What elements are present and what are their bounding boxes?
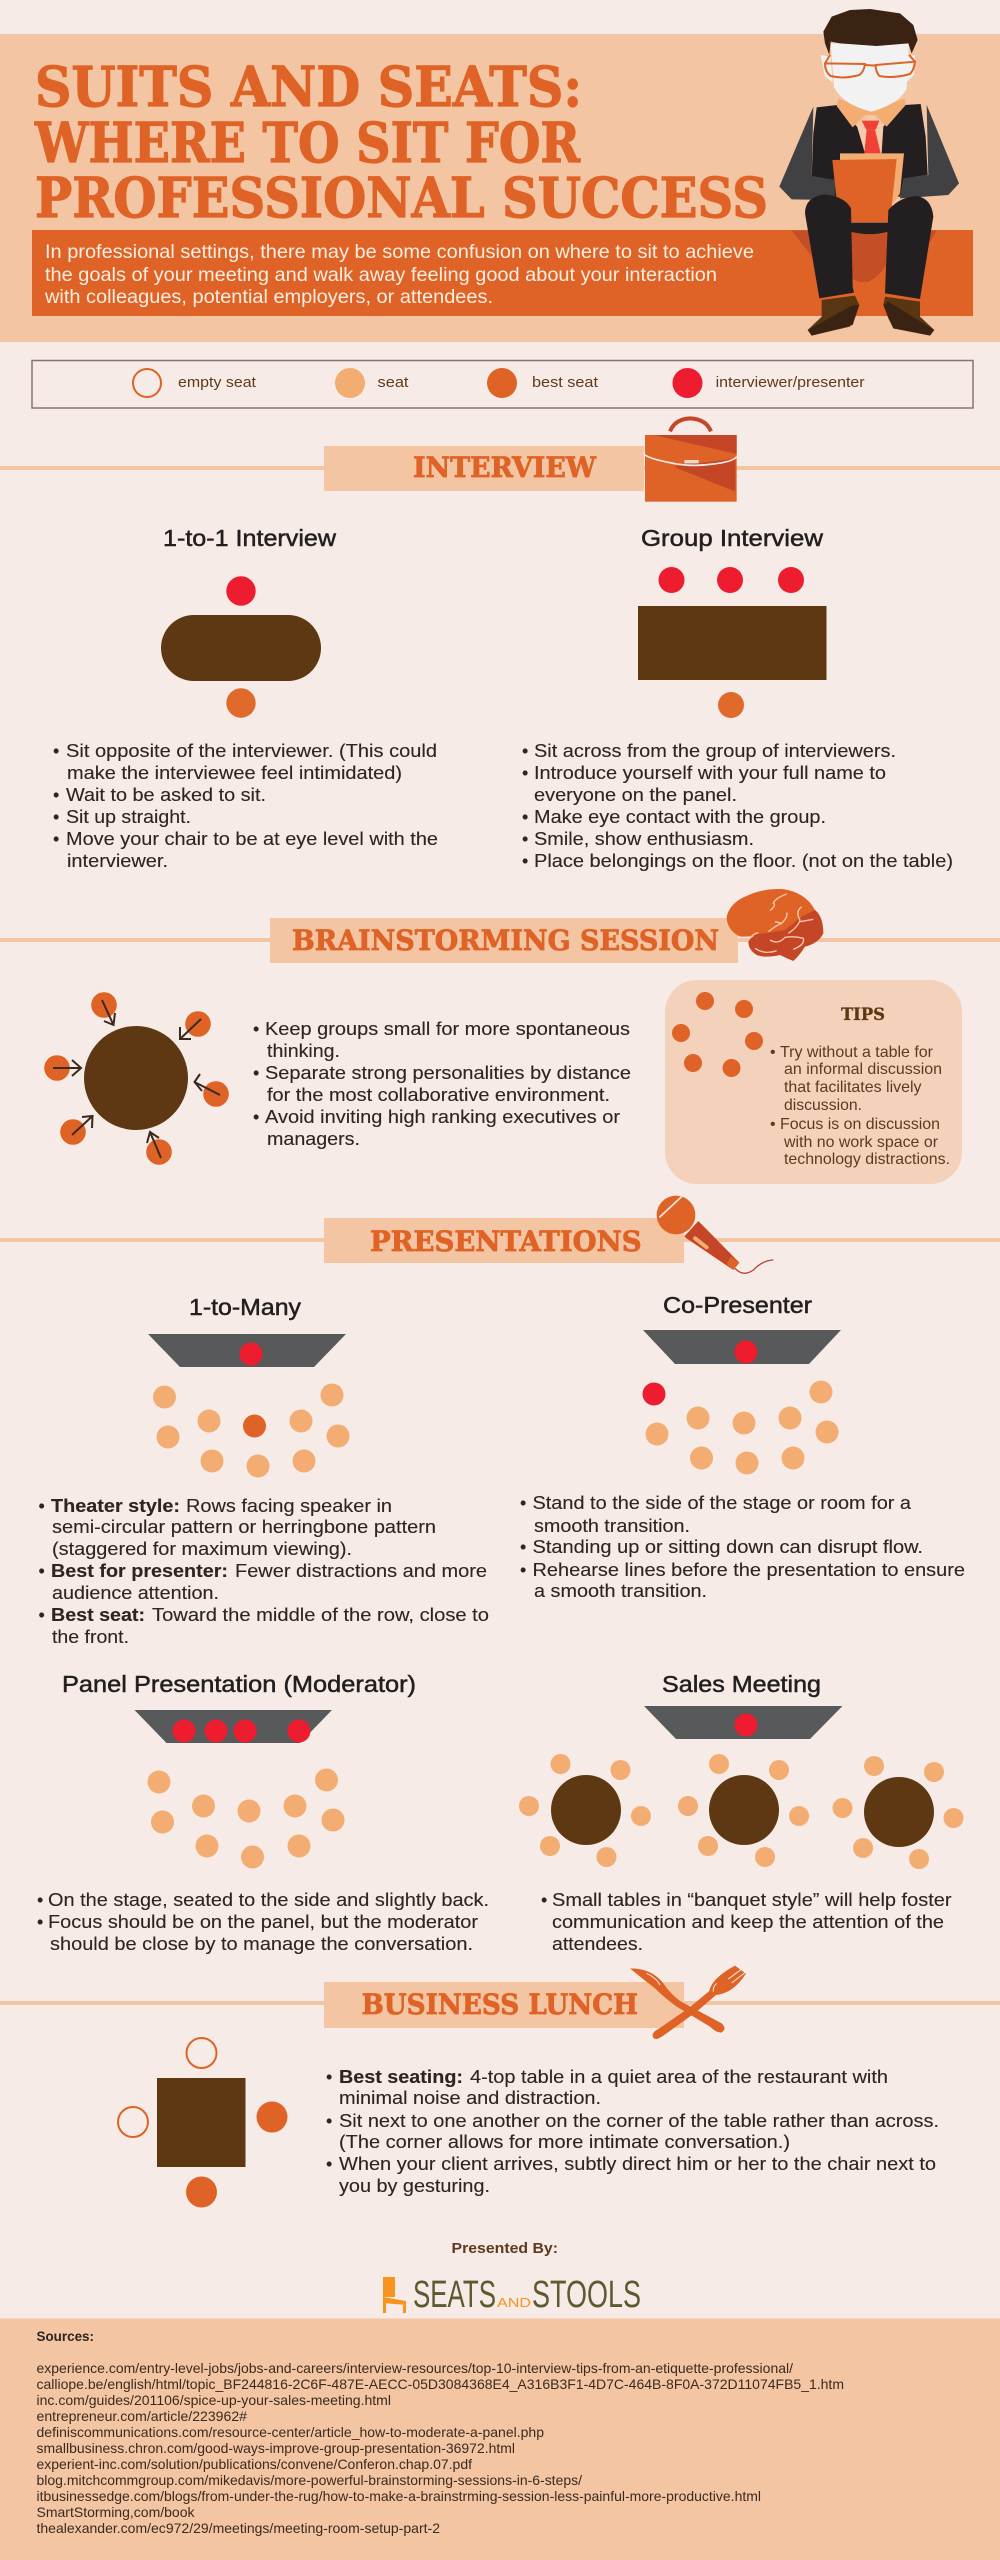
sources list: experient-inc.com/solution/publications/convene/Conferon.chap.07.pdf	[36, 2456, 472, 2472]
text: group tips: •	[522, 741, 528, 761]
text: business lunch tips: •	[326, 2067, 332, 2087]
panel: 1-to-1 interview: 1-to-1 Interview	[163, 525, 336, 551]
panel: co-presenter: Co-Presenter	[663, 1292, 812, 1318]
text: business lunch tips	[326, 2067, 939, 2196]
text: brainstorming points: Avoid inviting high ranking executives or	[265, 1107, 620, 1127]
sources list: experience.com/entry-level-jobs/jobs-and-careers/interview-resources/top-10-interview-tips-from-an-etiquette-professional/	[36, 2360, 793, 2376]
text: 1-to-1 tips: Wait to be asked to sit.	[66, 785, 266, 805]
text: 1-to-1 tips: make the interviewee feel intimidated)	[67, 763, 402, 783]
text: 1-to-many tips: •	[38, 1605, 45, 1625]
text: panel tips: should be close by to manage the conversation.	[50, 1934, 473, 1954]
diagram: 1-to-1 table	[161, 576, 321, 718]
panel: header	[0, 9, 1000, 342]
sources list: itbusinessedge.com/blogs/from-under-the-rug/how-to-make-a-brainstrming-session-less-painful-more-productive.html	[36, 2488, 761, 2504]
text: business lunch tips: Sit next to one another on the corner of the table rather than across.	[339, 2111, 939, 2131]
intro text bar: the goals of your meeting and walk away feeling good about your interaction	[45, 264, 717, 286]
text: brainstorming points: Keep groups small for more spontaneous	[265, 1019, 630, 1039]
legend: seat: seat	[378, 374, 409, 391]
text: group tips: •	[522, 763, 528, 783]
icon: chair	[383, 2277, 406, 2313]
logo: seats and stools: STOOLS	[532, 2274, 641, 2316]
legend: interviewer/presenter: interviewer/presenter	[716, 374, 865, 391]
text: brainstorming points: Separate strong personalities by distance	[265, 1063, 631, 1083]
text: business lunch tips: •	[326, 2111, 332, 2131]
text: co-presenter tips: •	[520, 1493, 526, 1513]
panel: co-presenter	[520, 1292, 965, 1601]
panel: panel presentation	[37, 1671, 489, 1954]
text: brainstorming points: thinking.	[267, 1041, 340, 1061]
diagram: group table	[638, 567, 826, 718]
sources list: calliope.be/english/html/topic_BF244816-2C6F-487E-AECC-05D3084368E4_A316B3F1-4D7C-464B-8F0A-372D11074FB5_1.htm	[36, 2376, 844, 2392]
text: co-presenter tips	[520, 1493, 965, 1601]
sources list: inc.com/guides/201106/spice-up-your-sales-meeting.html	[36, 2392, 391, 2408]
intro text bar	[32, 230, 973, 316]
text: group tips: Make eye contact with the group.	[534, 807, 826, 827]
panel: tips	[665, 980, 962, 1184]
diagram: stage and theater seating	[148, 1334, 350, 1478]
icon: brain	[727, 889, 823, 961]
text: 1-to-many tips: Rows facing speaker in	[186, 1496, 392, 1516]
tips text	[770, 1044, 950, 1168]
section heading: presentations: PRESENTATIONS	[370, 1225, 642, 1258]
title: SUITS AND SEATS:	[35, 54, 582, 119]
text: sales tips: communication and keep the attention of the	[552, 1912, 944, 1932]
tips text: Try without a table for	[780, 1044, 934, 1061]
diagram: banquet tables	[519, 1706, 964, 1869]
title: PROFESSIONAL SUCCESS	[35, 165, 768, 230]
text: sales tips	[541, 1890, 952, 1954]
text: group tips: •	[522, 807, 528, 827]
text: 1-to-1 tips: •	[53, 785, 59, 805]
text: sales tips: •	[541, 1890, 547, 1910]
text: 1-to-many tips: (staggered for maximum viewing).	[52, 1539, 352, 1559]
text: business lunch tips: 4-top table in a quiet area of the restaurant with	[470, 2067, 888, 2087]
panel: sales meeting	[519, 1671, 964, 1954]
section heading: brainstorming session: BRAINSTORMING SESSION	[292, 924, 719, 957]
panel: sales meeting: Sales Meeting	[662, 1671, 821, 1697]
text: brainstorming points: •	[253, 1107, 259, 1127]
logo: seats and stools	[383, 2274, 641, 2316]
text: 1-to-many tips	[38, 1496, 489, 1647]
sources list: smallbusiness.chron.com/good-ways-improve-group-presentation-36972.html	[36, 2440, 515, 2456]
text: group tips	[522, 741, 953, 871]
text: 1-to-many tips: Fewer distractions and more	[235, 1561, 487, 1581]
tips text: •	[770, 1116, 776, 1133]
section heading: business lunch: BUSINESS LUNCH	[362, 1988, 638, 2021]
legend	[32, 360, 973, 408]
text: business lunch tips: •	[326, 2154, 332, 2174]
icon: knife and fork	[630, 1966, 746, 2039]
sources list: entrepreneur.com/article/223962#	[36, 2408, 247, 2424]
text: 1-to-many tips: Theater style:	[51, 1496, 180, 1516]
logo: seats and stools: SEATS	[413, 2274, 496, 2316]
section heading: interview	[0, 446, 1000, 491]
legend: seat	[335, 368, 409, 398]
text: 1-to-1 tips: •	[53, 807, 59, 827]
text: co-presenter tips: Rehearse lines before the presentation to ensure	[532, 1560, 965, 1580]
text: brainstorming points: •	[253, 1019, 259, 1039]
sources list: definiscommunications.com/resource-center/article_how-to-moderate-a-panel.php	[36, 2424, 544, 2440]
text: 1-to-many tips: the front.	[52, 1627, 129, 1647]
text: 1-to-many tips: •	[38, 1496, 45, 1516]
text: group tips: Introduce yourself with your full name to	[534, 763, 886, 783]
section heading: interview: INTERVIEW	[413, 451, 597, 484]
text: business lunch tips: minimal noise and distraction.	[339, 2088, 601, 2108]
title: WHERE TO SIT FOR	[34, 110, 581, 175]
text: co-presenter tips: •	[520, 1537, 526, 1557]
legend: best seat: best seat	[532, 374, 599, 391]
icon: briefcase	[643, 418, 737, 502]
text: group tips: •	[522, 829, 528, 849]
text: 1-to-many tips: •	[38, 1561, 45, 1581]
text: group tips: Place belongings on the floor. (not on the table)	[534, 851, 953, 871]
panel: 1-to-1 interview	[53, 525, 438, 871]
title	[34, 54, 768, 230]
text: brainstorming points: for the most collaborative environment.	[267, 1085, 610, 1105]
text: 1-to-many tips: audience attention.	[52, 1583, 219, 1603]
text: 1-to-many tips: semi-circular pattern or herringbone pattern	[52, 1517, 436, 1537]
logo: seats and stools: AND	[497, 2295, 531, 2310]
sources list: blog.mitchcommgroup.com/mikedavis/more-powerful-brainstorming-sessions-in-6-steps/	[36, 2472, 582, 2488]
text: group tips: everyone on the panel.	[534, 785, 737, 805]
sources list: thealexander.com/ec972/29/meetings/meeting-room-setup-part-2	[36, 2520, 440, 2536]
section heading: business lunch	[0, 1982, 1000, 2028]
text: 1-to-many tips: Best seat:	[51, 1605, 145, 1625]
tips text: discussion.	[784, 1097, 862, 1114]
text: co-presenter tips: Stand to the side of the stage or room for a	[532, 1493, 912, 1513]
text: business lunch tips: you by gesturing.	[339, 2176, 490, 2196]
intro text bar: In professional settings, there may be some confusion on where to sit to achieve	[45, 241, 754, 263]
panel: 1-to-many	[38, 1294, 489, 1647]
text: co-presenter tips: a smooth transition.	[534, 1581, 707, 1601]
illustration: seated man	[779, 9, 959, 336]
text: co-presenter tips: Standing up or sitting down can disrupt flow.	[532, 1537, 923, 1557]
text: panel tips: •	[37, 1912, 43, 1932]
text: group tips: •	[522, 851, 528, 871]
text: business lunch tips: (The corner allows for more intimate conversation.)	[339, 2132, 790, 2152]
tips heading: TIPS	[841, 1005, 885, 1024]
text: sales tips: Small tables in “banquet style” will help foster	[552, 1890, 952, 1910]
text: business lunch tips: Best seating:	[339, 2067, 463, 2087]
diagram: panel stage and seating	[134, 1710, 344, 1868]
panel: panel presentation: Panel Presentation (Moderator)	[62, 1671, 416, 1697]
tips text: technology distractions.	[784, 1151, 950, 1168]
diagram: seats without table	[672, 992, 763, 1077]
text: co-presenter tips: •	[520, 1560, 526, 1580]
text: brainstorming points	[253, 1019, 631, 1149]
legend: best seat	[487, 368, 599, 398]
text: 1-to-1 tips: interviewer.	[67, 851, 168, 871]
legend: empty seat	[133, 369, 257, 397]
text: 1-to-1 tips: Move your chair to be at eye level with the	[66, 829, 438, 849]
text: 1-to-1 tips: Sit up straight.	[66, 807, 191, 827]
intro text bar: with colleagues, potential employers, or attendees.	[44, 286, 493, 308]
icon: microphone	[657, 1196, 773, 1273]
text: group tips: Smile, show enthusiasm.	[534, 829, 754, 849]
section heading: brainstorming session	[0, 918, 1000, 963]
text: sales tips: attendees.	[552, 1934, 643, 1954]
legend: interviewer/presenter	[672, 368, 865, 398]
text: panel tips: Focus should be on the panel, but the moderator	[48, 1912, 478, 1932]
panel: group interview	[522, 525, 953, 871]
tips text: Focus is on discussion	[780, 1116, 940, 1133]
diagram: co-presenter stage and seating	[642, 1330, 841, 1474]
text: panel tips	[37, 1890, 489, 1954]
sources list	[36, 2360, 844, 2536]
text: brainstorming points: managers.	[267, 1129, 360, 1149]
text: 1-to-1 tips: •	[53, 741, 59, 761]
panel: group interview: Group Interview	[641, 525, 823, 551]
panel: brainstorming diagram	[44, 992, 229, 1165]
text: panel tips: On the stage, seated to the side and slightly back.	[48, 1890, 489, 1910]
panel: sources	[0, 2318, 1000, 2560]
text: 1-to-1 tips	[53, 741, 438, 871]
text: co-presenter tips: smooth transition.	[534, 1516, 690, 1536]
sources list: SmartStorming,com/book	[36, 2504, 195, 2520]
text: group tips: Sit across from the group of interviewers.	[534, 741, 896, 761]
diagram: 4-top table	[118, 2038, 288, 2208]
sources heading: Sources:	[36, 2328, 94, 2344]
tips text: an informal discussion	[784, 1061, 942, 1078]
presented by: Presented By:	[452, 2240, 558, 2257]
arrows toward table	[53, 1000, 220, 1158]
tips text: that facilitates lively	[784, 1079, 922, 1096]
tips text: with no work space or	[783, 1134, 939, 1151]
text: business lunch tips: When your client arrives, subtly direct him or her to the chair next to	[339, 2154, 936, 2174]
text: 1-to-1 tips: Sit opposite of the interviewer. (This could	[66, 741, 437, 761]
text: 1-to-1 tips: •	[53, 829, 59, 849]
section heading: presentations	[0, 1218, 1000, 1263]
tips text: •	[770, 1044, 776, 1061]
text: panel tips: •	[37, 1890, 43, 1910]
text: 1-to-many tips: Best for presenter:	[51, 1561, 228, 1581]
text: 1-to-many tips: Toward the middle of the row, close to	[152, 1605, 489, 1625]
text: brainstorming points: •	[253, 1063, 259, 1083]
legend: empty seat: empty seat	[178, 374, 257, 391]
panel: 1-to-many: 1-to-Many	[189, 1294, 302, 1320]
